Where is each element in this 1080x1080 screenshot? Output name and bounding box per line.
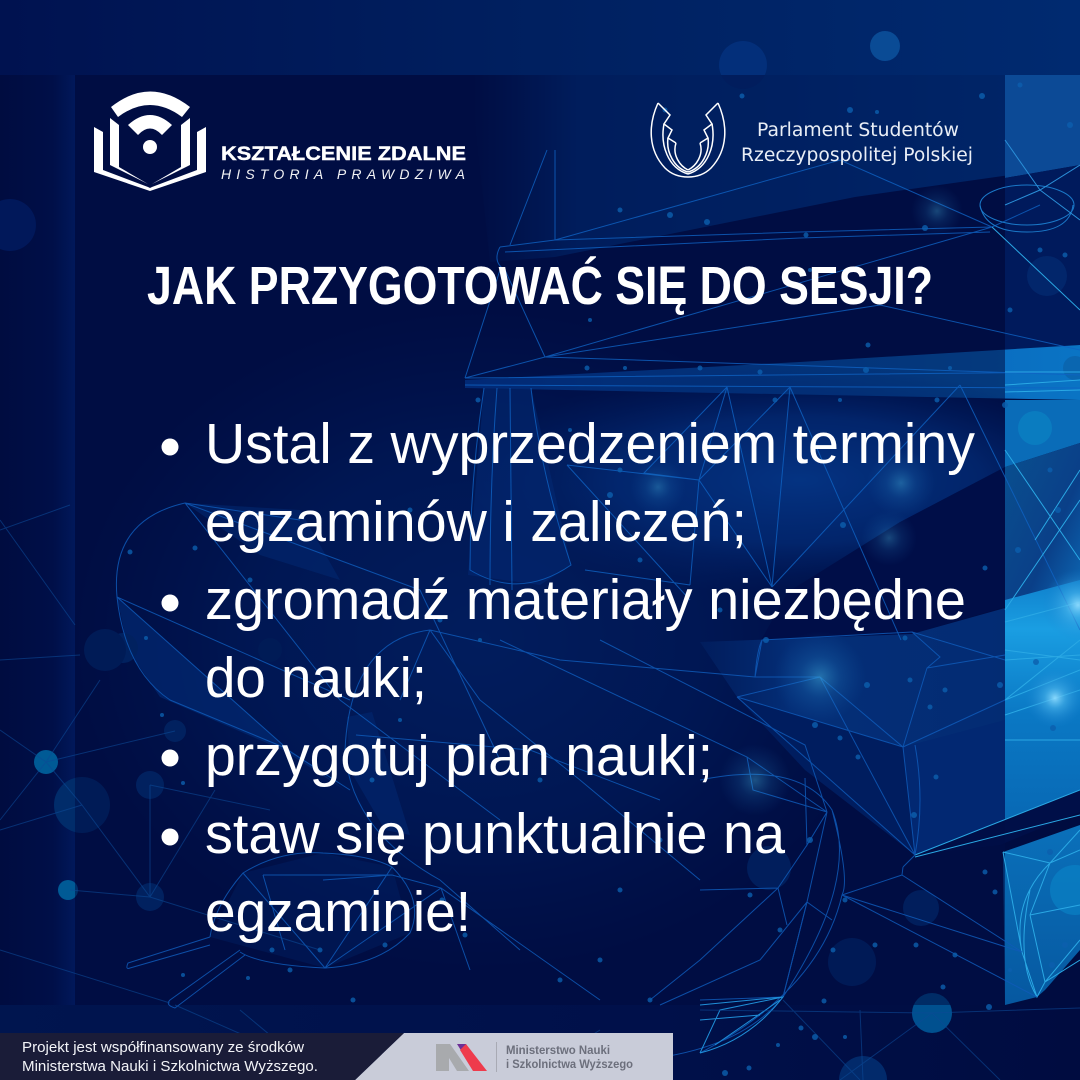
ministry text: Ministerstwo Nauki — [506, 1045, 610, 1057]
wordmark: Rzeczypospolitej Polskiej — [741, 145, 973, 166]
ministry text — [506, 1045, 633, 1071]
bullet 2: zgromadź materiały niezbędne — [205, 568, 966, 632]
wireframe: bright bottom corner lines — [700, 997, 783, 1053]
logo: Kształcenie Zdalne — [94, 92, 466, 191]
dark funding panel — [0, 1033, 404, 1080]
wordmark: HISTORIA PRAWDZIWA — [221, 166, 465, 182]
wireframe: graduation cap — [465, 150, 1080, 640]
bullet 2: do nauki; — [205, 646, 427, 710]
wordmark: KSZTAŁCENIE ZDALNE — [221, 144, 466, 165]
footer: funding bar — [0, 1033, 673, 1080]
wordmark — [741, 120, 973, 166]
funding text: Projekt jest współfinansowany ze środków — [22, 1040, 305, 1056]
bullet 1 — [162, 412, 975, 554]
logo: Parlament Studentów — [651, 103, 973, 177]
title: JAK PRZYGOTOWAĆ SIĘ DO SESJI? — [147, 256, 933, 316]
bullet 3: przygotuj plan nauki; — [205, 724, 713, 788]
glow highlights — [630, 185, 1080, 816]
wordmark: Parlament Studentów — [757, 120, 959, 141]
bullet 4: staw się punktualnie na — [205, 802, 785, 866]
icon: wifi book — [94, 92, 206, 191]
icon: PSRP emblem — [651, 103, 725, 177]
panel: dark overlay — [75, 75, 1005, 1005]
network lines: outer margin — [0, 505, 1080, 1080]
ministry text: i Szkolnictwa Wyższego — [506, 1059, 633, 1071]
icon: ministry logo — [436, 1042, 497, 1072]
light ministry panel — [355, 1033, 673, 1080]
wordmark — [221, 144, 466, 182]
bullet 4 — [162, 802, 785, 944]
wireframe: apple and leaves — [116, 503, 1037, 1060]
bullet 4: egzaminie! — [205, 880, 471, 944]
bullet 2 — [162, 568, 966, 710]
wireframe: cap button and bright right lines — [915, 140, 1080, 997]
funding text: Ministerstwa Nauki i Szkolnictwa Wyższego. — [22, 1059, 318, 1075]
bullet 1: egzaminów i zaliczeń; — [205, 490, 747, 554]
bullet 1: Ustal z wyprzedzeniem terminy — [205, 412, 975, 476]
bullet list — [162, 412, 975, 944]
funding text — [22, 1040, 318, 1075]
